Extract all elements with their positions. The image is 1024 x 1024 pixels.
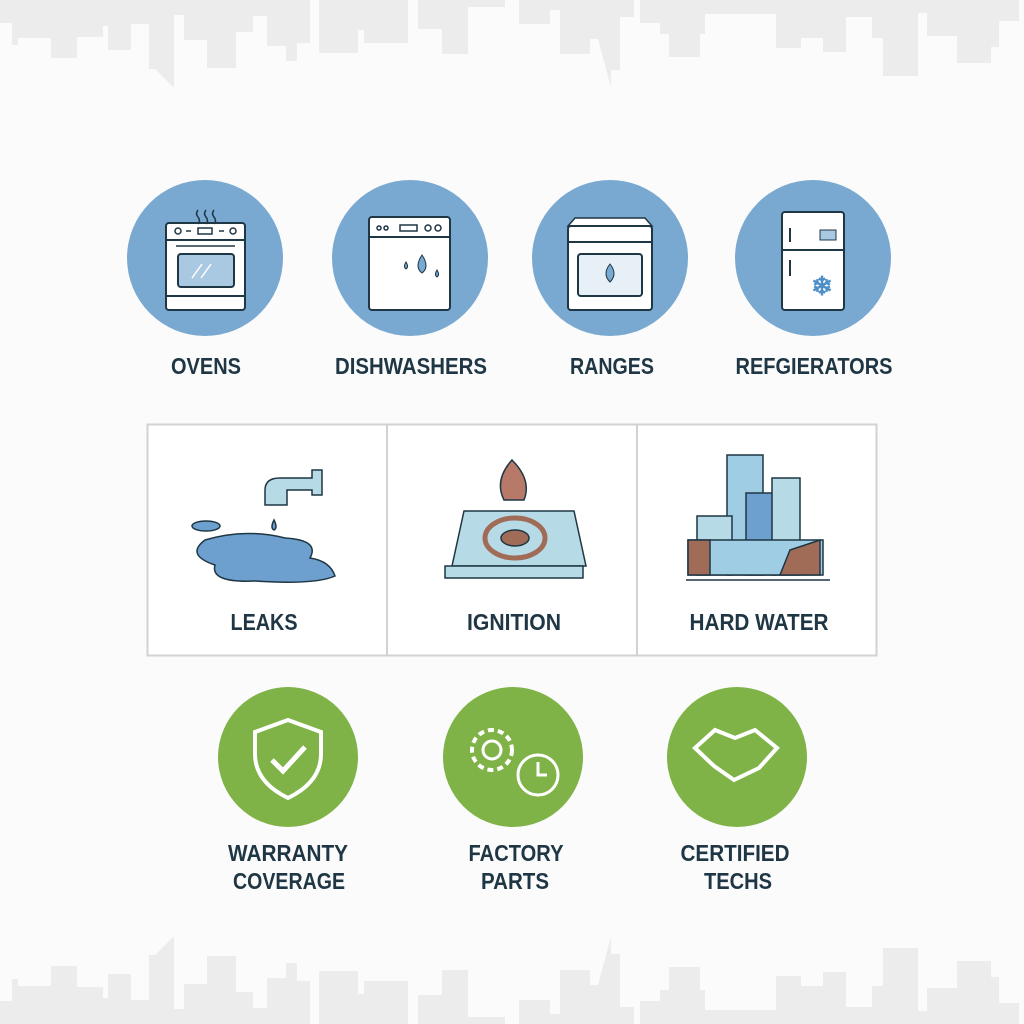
label: warranty coverage: WARRANTY bbox=[228, 840, 348, 866]
icon: ovens bbox=[127, 180, 283, 336]
icon: refrigerators: ❄ bbox=[811, 271, 833, 301]
text: PARTS bbox=[481, 868, 549, 894]
text: COVERAGE bbox=[233, 868, 345, 894]
icon: leaks bbox=[192, 470, 335, 582]
text: TECHS bbox=[704, 868, 772, 894]
label: dishwashers: DISHWASHERS bbox=[335, 353, 487, 379]
label: hard water: HARD WATER bbox=[690, 609, 829, 635]
icon: refrigerators bbox=[735, 180, 891, 336]
label: ovens: OVENS bbox=[171, 353, 241, 379]
label: ranges: RANGES bbox=[570, 353, 654, 379]
icon: hard water bbox=[686, 455, 830, 580]
label: leaks: LEAKS bbox=[230, 609, 298, 635]
label: certified techs: CERTIFIED bbox=[680, 840, 790, 866]
icon: handshake bbox=[667, 687, 807, 827]
label: refrigerators: REFGIERATORS bbox=[736, 353, 892, 379]
panel: problems bbox=[148, 424, 876, 656]
icon: warranty bbox=[218, 687, 358, 827]
icon: ignition bbox=[445, 460, 586, 578]
label: factory parts: FACTORY bbox=[468, 840, 564, 866]
icon: dishwashers bbox=[332, 180, 488, 336]
icon: factory parts bbox=[443, 687, 583, 827]
icon: ranges bbox=[532, 180, 688, 336]
label: ignition: IGNITION bbox=[467, 609, 561, 635]
